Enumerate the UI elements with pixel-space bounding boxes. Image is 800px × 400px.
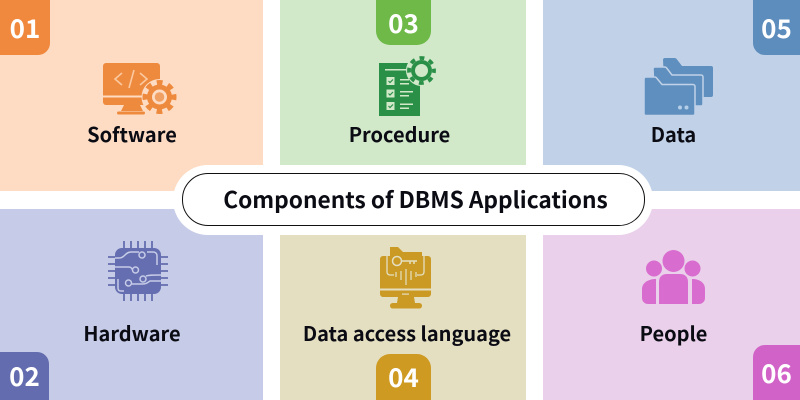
title <box>182 173 645 226</box>
panel: procedure <box>280 0 526 165</box>
badge 04 <box>376 354 431 400</box>
label: procedure: Procedure <box>349 119 450 148</box>
badge 06: 06 <box>761 354 792 390</box>
badge 05 <box>753 0 800 55</box>
panel: hardware <box>0 209 263 400</box>
badge 06 <box>753 345 800 400</box>
panel: data <box>543 0 800 191</box>
badge 01: 01 <box>10 8 40 46</box>
badge 03: 03 <box>388 4 419 40</box>
panel: data access language <box>280 235 526 400</box>
label: hardware: Hardware <box>83 318 181 347</box>
title pill <box>173 165 653 235</box>
badge 01 <box>0 0 50 55</box>
panel: people <box>543 209 800 400</box>
title: Components of DBMS Applications <box>223 182 608 215</box>
panel: software <box>0 0 263 191</box>
badge 04: 04 <box>388 358 419 395</box>
label: data access language: Data access language <box>303 318 511 347</box>
label: software: Software <box>87 119 177 148</box>
label: people: People <box>640 318 707 347</box>
label: data: Data <box>651 119 696 148</box>
badge 05: 05 <box>761 8 792 46</box>
badge 03 <box>376 0 431 45</box>
badge 02 <box>0 352 49 400</box>
badge 02: 02 <box>9 357 40 394</box>
